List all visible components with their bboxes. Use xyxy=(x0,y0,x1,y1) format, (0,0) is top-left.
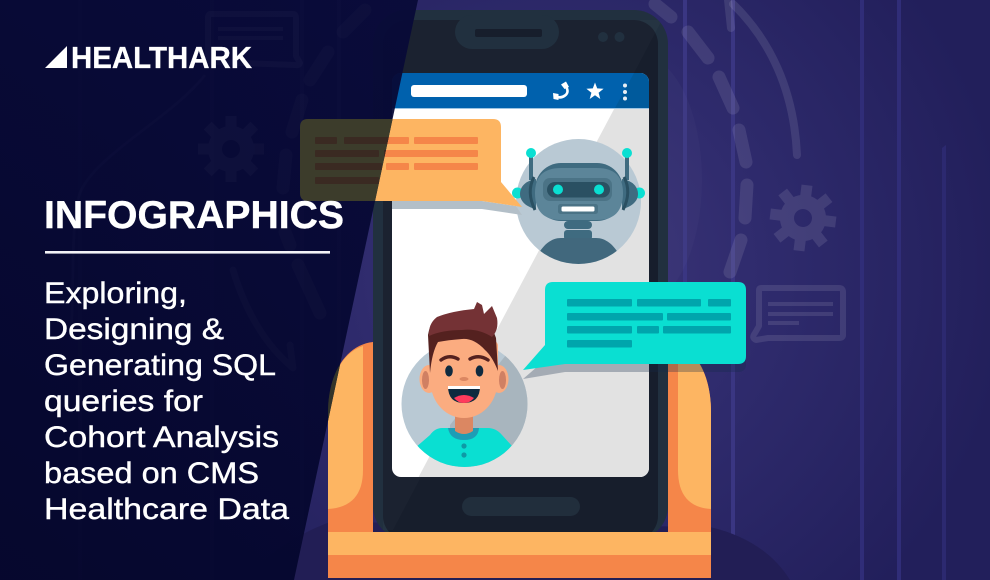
background dashed arc xyxy=(655,4,747,272)
base light strip xyxy=(328,532,711,555)
description text: queries for xyxy=(44,385,203,418)
background vertical lines xyxy=(683,0,946,580)
dark bubble bars xyxy=(315,137,389,184)
teal bubble shadow xyxy=(523,360,746,379)
teal bubble shape xyxy=(523,282,746,370)
antenna joints xyxy=(530,177,628,210)
phone notch xyxy=(455,15,559,49)
chair right side xyxy=(668,342,711,540)
ear shading xyxy=(422,371,506,389)
icon: background gear right xyxy=(766,181,840,255)
base dark strip xyxy=(328,555,711,578)
person mouth xyxy=(448,386,480,403)
phone screen xyxy=(392,73,649,477)
person shirt xyxy=(418,428,512,467)
robot neck xyxy=(564,221,592,240)
icon: faint speech box xyxy=(208,14,300,65)
speech bubble: robot xyxy=(300,119,522,207)
orange bubble shape xyxy=(300,119,522,207)
icon: background speech box right xyxy=(753,288,843,340)
logo xyxy=(45,41,252,75)
robot visor inner xyxy=(547,182,610,198)
person nose xyxy=(460,377,468,381)
teal bubble text bars xyxy=(567,299,731,348)
orange base xyxy=(328,532,711,578)
robot body xyxy=(540,238,617,264)
faint glow beside phone xyxy=(578,55,702,305)
robot head xyxy=(535,163,623,221)
handset arc xyxy=(556,85,568,97)
robot eyes xyxy=(553,184,604,194)
phone body xyxy=(383,20,658,540)
bubble shadow: robot xyxy=(392,201,522,215)
screen header bar xyxy=(392,73,649,108)
person neck xyxy=(455,412,473,434)
robot teeth xyxy=(562,206,594,212)
person teeth xyxy=(448,386,480,389)
orange bubble text bars xyxy=(315,137,478,184)
person eyes xyxy=(445,365,483,377)
dark overlay faint patterns xyxy=(70,0,365,580)
heading divider xyxy=(45,251,330,254)
icon: menu dots xyxy=(623,84,627,100)
phone cameras xyxy=(598,32,624,42)
description text xyxy=(44,277,290,526)
description text: Exploring, xyxy=(44,277,187,310)
phone xyxy=(373,10,668,540)
header search pill xyxy=(411,85,527,97)
logo triangle xyxy=(45,46,67,68)
darkened bubble portion xyxy=(300,119,392,201)
icon: faint gear xyxy=(198,116,264,182)
icon: star xyxy=(586,82,604,99)
antenna tips xyxy=(526,148,632,158)
person circle xyxy=(402,341,528,467)
chair left side xyxy=(328,342,373,540)
screen light area xyxy=(392,73,649,477)
orange chair back xyxy=(328,342,711,540)
handset ends xyxy=(553,82,569,100)
robot avatar xyxy=(512,139,645,264)
description text: Healthcare Data xyxy=(44,493,290,526)
logo wordmark: HEALTHARK xyxy=(71,41,252,75)
faint dashed arc xyxy=(283,10,365,313)
dark bubble shape xyxy=(300,119,392,201)
shirt buttons xyxy=(461,443,467,458)
robot ears xyxy=(520,179,638,209)
header sheen xyxy=(615,73,650,108)
description text: Cohort Analysis xyxy=(44,421,279,454)
description text: Generating SQL xyxy=(44,349,276,382)
faint vertical lines xyxy=(78,0,341,580)
dark ground ellipse xyxy=(250,522,790,580)
person avatar xyxy=(402,302,528,467)
person tongue xyxy=(454,395,474,403)
phone speaker xyxy=(475,29,542,37)
person hair light xyxy=(429,302,497,337)
robot side lights xyxy=(512,188,645,198)
header underline xyxy=(392,108,649,109)
chair right highlight xyxy=(678,346,711,509)
robot mouth xyxy=(558,204,598,214)
phone bezel xyxy=(373,10,668,540)
phone home button xyxy=(462,497,580,516)
heading: INFOGRAPHICS xyxy=(44,194,344,237)
speech bubble: person xyxy=(523,282,746,370)
screen gray area xyxy=(418,73,649,477)
icon: phone handset xyxy=(553,82,569,100)
robot visor xyxy=(543,178,612,201)
chair left highlight xyxy=(328,346,363,509)
person brows xyxy=(441,357,488,360)
dark diagonal overlay xyxy=(0,0,418,580)
person collar xyxy=(448,428,479,440)
person face xyxy=(430,336,498,418)
faint thin arc xyxy=(233,270,293,368)
phone sheen xyxy=(383,20,662,530)
person ears xyxy=(420,365,508,393)
robot antennas xyxy=(531,155,627,180)
person hair dark xyxy=(428,320,498,373)
description text: based on CMS xyxy=(44,457,259,490)
person circle shade xyxy=(450,356,528,467)
robot circle xyxy=(516,139,641,264)
faint curve xyxy=(70,75,205,340)
background thin arc with arrow xyxy=(728,0,797,155)
robot face xyxy=(535,168,623,220)
description text: Designing & xyxy=(44,313,224,346)
darkened chair sliver xyxy=(328,364,340,421)
